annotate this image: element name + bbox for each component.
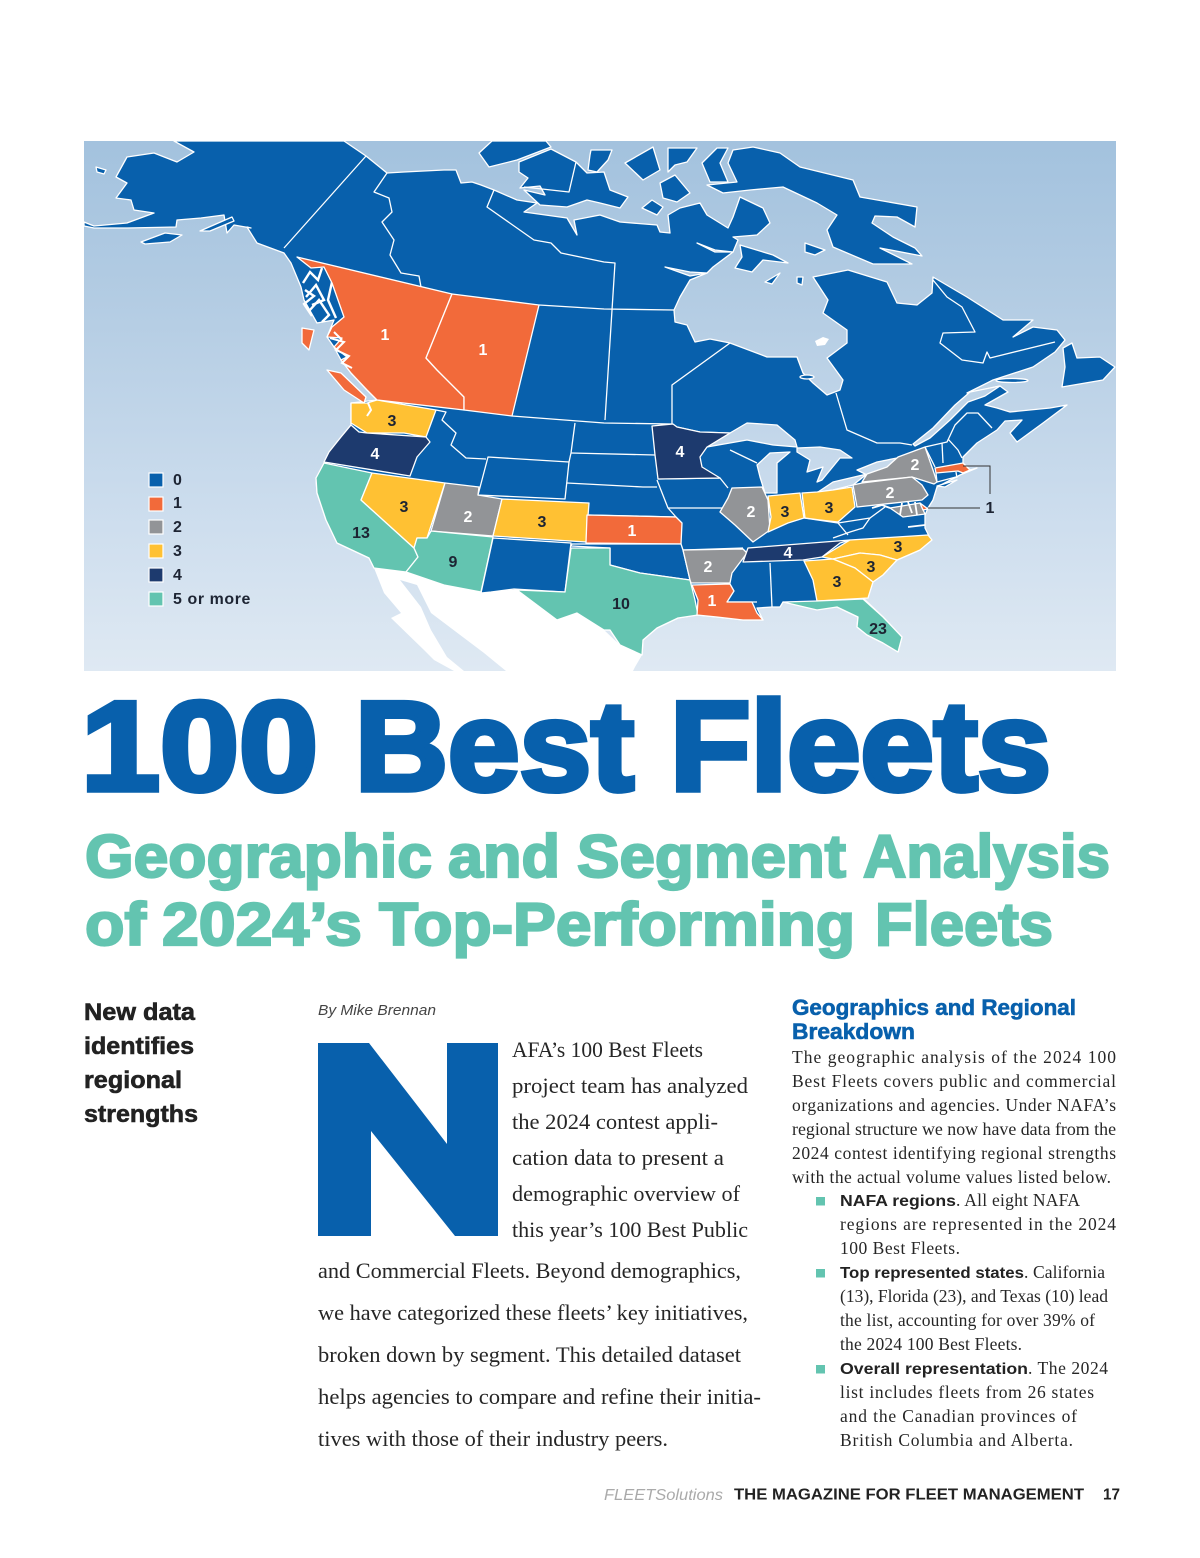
body text: article introduction: and Commercial Fleets. Beyond demographics, — [318, 1258, 741, 1283]
subtitle: of — [85, 891, 147, 958]
state count labels: 3 — [781, 504, 790, 521]
Ohio — [802, 487, 855, 522]
Alaska panhandle fjords — [303, 268, 336, 322]
Pennsylvania — [853, 477, 928, 507]
body text: article introduction: project team has analyzed — [512, 1073, 748, 1098]
bullet: NAFA regions — [816, 1190, 1116, 1258]
state count labels: 3 — [825, 500, 834, 517]
Texas — [517, 548, 698, 655]
legend: 3 — [173, 543, 182, 560]
sidebar deck: New data identifies regional strengths — [84, 999, 198, 1128]
bullet: NAFA regions: 100 Best Fleets. — [840, 1238, 960, 1258]
state count labels — [352, 327, 920, 638]
callout: Massachusetts and Delaware count — [928, 466, 995, 517]
state count labels: 23 — [869, 621, 887, 638]
Alberta — [426, 294, 539, 416]
paragraph: geographic analysis: Best Fleets covers public and commercial — [792, 1071, 1116, 1091]
California — [316, 463, 418, 572]
bullet: Top represented states: the list, accounting for over 39% of — [840, 1310, 1095, 1330]
paragraph: geographic analysis: with the actual volume values listed below. — [792, 1167, 1111, 1187]
state count labels: 2 — [886, 485, 895, 502]
title: Fleets — [670, 675, 1051, 817]
footer: magazine name and page number: 17 — [1103, 1486, 1120, 1504]
Indiana — [768, 493, 804, 532]
state count labels: 2 — [911, 457, 920, 474]
state count labels: 9 — [449, 554, 458, 571]
bullet: Top represented states: the 2024 100 Best Fleets. — [840, 1334, 1022, 1354]
sidebar deck: New data identifies regional strengths: strengths — [84, 1101, 198, 1128]
state count labels: 1 — [628, 523, 637, 540]
North Carolina — [822, 535, 932, 560]
state count labels: 3 — [867, 559, 876, 576]
drop cap N — [318, 1043, 498, 1236]
bullet: Overall representation — [816, 1358, 1108, 1450]
state count labels: 2 — [747, 504, 756, 521]
body text: article introduction: this year’s 100 Best Public — [512, 1217, 748, 1242]
subtitle: Geographic — [85, 823, 432, 890]
bullet: Top represented states: (13), Florida (23), and Texas (10) lead — [840, 1286, 1108, 1306]
state count labels: 4 — [371, 446, 380, 463]
Kansas — [586, 515, 682, 544]
bullet: Overall representation: list includes fleets from 26 states — [840, 1382, 1094, 1402]
sidebar deck: New data identifies regional strengths: New data — [84, 999, 195, 1026]
Mexico — [374, 568, 642, 671]
Wyoming — [478, 457, 569, 499]
Minnesota — [652, 424, 730, 479]
state count labels: 3 — [833, 574, 842, 591]
paragraph: geographic analysis: organizations and agencies. Under NAFA’s — [792, 1095, 1116, 1115]
sidebar deck: New data identifies regional strengths: regional — [84, 1067, 182, 1094]
paragraph: geographic analysis: 2024 contest identifying regional strengths — [792, 1143, 1116, 1163]
Nevada — [361, 473, 445, 548]
sidebar deck: New data identifies regional strengths: identifies — [84, 1033, 194, 1060]
legend: 2 — [173, 519, 182, 536]
subtitle: Analysis — [863, 823, 1110, 890]
Massachusetts — [935, 463, 970, 473]
bullet: Top represented states: Top represented states — [840, 1265, 1024, 1282]
callout: Massachusetts and Delaware count: 1 — [986, 500, 995, 517]
Oregon — [324, 425, 430, 476]
subtitle: Segment — [577, 823, 846, 890]
state count labels: 4 — [676, 444, 685, 461]
arctic islands — [96, 141, 1115, 387]
New York — [862, 447, 937, 484]
body text: article introduction: helps agencies to compare and refine their initia- — [318, 1384, 761, 1409]
Vancouver Island — [327, 370, 366, 403]
bullet: NAFA regions: regions are represented in the 2024 — [840, 1214, 1116, 1234]
Great Lakes and inland water — [665, 243, 1000, 493]
section heading: Geographics and Regional Breakdown: Breakdown — [792, 1019, 915, 1044]
subtitle: Top-Performing — [379, 891, 855, 958]
state count labels: 1 — [708, 593, 717, 610]
Colorado — [493, 499, 589, 542]
state count labels: 10 — [612, 596, 630, 613]
bullet: Overall representation: and the Canadian provinces of — [840, 1406, 1077, 1426]
paragraph: geographic analysis: The geographic analysis of the 2024 100 — [792, 1047, 1116, 1067]
South Carolina — [833, 553, 897, 582]
body text: article introduction — [318, 1037, 761, 1451]
footer: magazine name and page number: THE MAGAZINE FOR FLEET MANAGEMENT — [734, 1486, 1084, 1504]
Delaware — [920, 503, 928, 510]
body text: article introduction: the 2024 contest appli- — [512, 1109, 718, 1134]
legend: 5 or more — [173, 591, 251, 608]
Louisiana — [692, 584, 763, 620]
legend: 1 — [173, 495, 182, 512]
title: Best — [355, 675, 634, 817]
Arkansas — [683, 549, 747, 583]
subtitle: and — [448, 823, 560, 890]
subtitle: 2024’s — [162, 891, 362, 958]
state count labels: 4 — [784, 545, 793, 562]
legend — [149, 472, 251, 608]
map: North America fleets by state — [84, 141, 1116, 671]
section heading: Geographics and Regional Breakdown: Geographics and Regional — [792, 995, 1076, 1020]
subtitle — [85, 823, 1110, 958]
bullet: Overall representation: British Columbia and Alberta. — [840, 1430, 1073, 1450]
Oklahoma — [571, 544, 690, 580]
paragraph: geographic analysis: regional structure we now have data from the — [792, 1119, 1116, 1139]
state count labels: 3 — [538, 514, 547, 531]
Georgia — [804, 559, 873, 601]
Long Island — [937, 480, 957, 487]
bullet: NAFA regions: NAFA regions — [840, 1193, 956, 1210]
bullet: Overall representation: Overall representation — [840, 1361, 1028, 1378]
body text: article introduction: tives with those of their industry peers. — [318, 1426, 668, 1451]
Utah — [431, 483, 502, 536]
title: 100 — [81, 675, 318, 817]
Washington — [351, 400, 436, 437]
British Columbia — [297, 257, 464, 410]
Arizona — [406, 531, 493, 592]
body text: article introduction: AFA’s 100 Best Fleets — [512, 1037, 703, 1062]
subtitle: Fleets — [875, 891, 1053, 958]
title — [81, 675, 1051, 817]
bullet: Overall representation: . The 2024 — [1028, 1358, 1108, 1378]
state count labels: 13 — [352, 525, 370, 542]
byline: By Mike Brennan — [318, 1003, 436, 1019]
Maryland — [890, 503, 925, 517]
Illinois — [720, 487, 770, 542]
bullet: Top represented states — [816, 1262, 1108, 1354]
Florida — [783, 599, 902, 652]
legend: 4 — [173, 567, 182, 584]
state count labels: 3 — [400, 499, 409, 516]
state count labels: 3 — [894, 539, 903, 556]
state count labels: 1 — [381, 327, 390, 344]
paragraph: geographic analysis — [792, 1047, 1116, 1187]
Maryland bay stripes — [872, 502, 925, 527]
state count labels: 1 — [479, 342, 488, 359]
bullet: NAFA regions: . All eight NAFA — [956, 1190, 1080, 1210]
state count labels: 2 — [704, 559, 713, 576]
New Mexico — [481, 538, 571, 593]
British Columbia coast and Puget Sound inlets — [330, 332, 371, 416]
body text: article introduction: cation data to present a — [512, 1145, 724, 1170]
landmass: Canada and United States — [84, 141, 1067, 655]
footer: magazine name and page number: FLEETSolutions — [604, 1487, 723, 1504]
footer: magazine name and page number — [604, 1486, 1120, 1504]
Tennessee — [743, 540, 850, 562]
map states with fleet counts — [297, 257, 970, 655]
section heading: Geographics and Regional Breakdown — [792, 995, 1076, 1044]
state count labels: 2 — [464, 509, 473, 526]
Hudson Bay islets — [815, 337, 829, 346]
state count labels: 3 — [388, 413, 397, 430]
body text: article introduction: broken down by segment. This detailed dataset — [318, 1342, 741, 1367]
Canadian province and US state boundaries — [284, 156, 1055, 607]
body text: article introduction: demographic overview of — [512, 1181, 741, 1206]
Haida Gwaii — [302, 328, 314, 350]
bullet: Top represented states: . California — [1024, 1262, 1105, 1282]
body text: article introduction: we have categorized these fleets’ key initiatives, — [318, 1300, 748, 1325]
legend: 0 — [173, 472, 182, 489]
